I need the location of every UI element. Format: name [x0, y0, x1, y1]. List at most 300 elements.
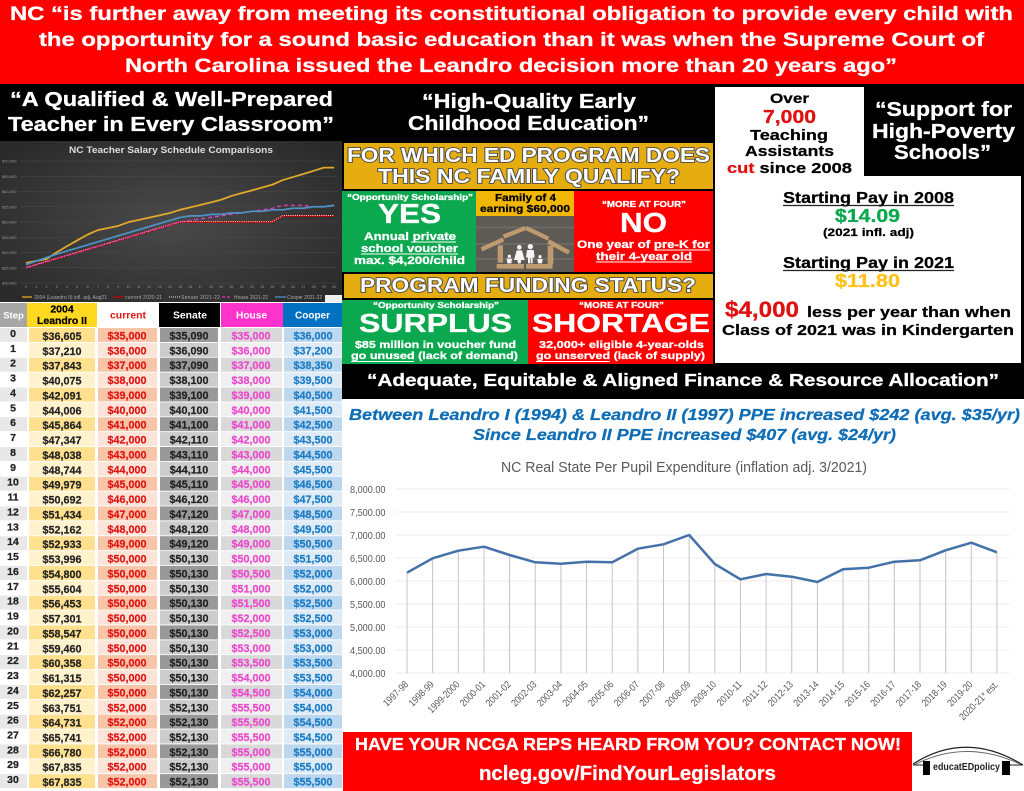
card: more at four no: their 4-year old: [596, 251, 692, 263]
row: step 23: $53,500: [293, 672, 333, 684]
callout: teaching assistants cut: [727, 90, 852, 177]
line chart: real state per pupil expenditure: 2001-02: [483, 679, 513, 709]
row: step 9: $44,000: [231, 464, 271, 476]
row: step 12: $47,120: [169, 509, 209, 521]
text: PPE increase summary: Between Leandro I (1994) & Leandro II (1997) PPE increased $242 (avg. $35/yr): [349, 407, 1020, 424]
line chart: teacher salary schedule comparisons: $70,000: [2, 158, 17, 164]
text: PPE increase summary: Since Leandro II PPE increased $407 (avg. $24/yr): [473, 427, 896, 444]
row: step 16: 16: [7, 566, 19, 578]
table header row: Cooper: [295, 310, 330, 322]
row: step 20: $52,500: [231, 628, 271, 640]
line chart: real state per pupil expenditure: 5,500.00: [350, 599, 386, 611]
row: step 30: $52,130: [169, 777, 209, 789]
row: step 5: [0, 402, 342, 417]
row: step 0: $35,000: [231, 330, 271, 342]
title banner: the opportunity for a sound basic education than it was when the Supreme Court of: [39, 29, 985, 51]
row: step 3: $38,000: [231, 375, 271, 387]
heading: finance and resource allocation: “Adequate, Equitable & Aligned Finance & Resource Allocation”: [367, 370, 999, 390]
row: step 29: $52,000: [107, 762, 147, 774]
line chart: real state per pupil expenditure: 2011-12: [740, 679, 770, 708]
row: step 22: $60,358: [42, 658, 82, 670]
card: more at four no: One year of pre-K for: [577, 239, 711, 251]
row: step 5: 5: [10, 402, 16, 414]
card: opportunity scholarship yes: YES: [378, 198, 441, 229]
row: step 9: 9: [10, 462, 16, 474]
row: step 29: $67,835: [42, 762, 82, 774]
card: surplus: SURPLUS: [359, 308, 512, 338]
row: step 22: [0, 655, 342, 670]
row: step 4: $39,100: [169, 390, 209, 402]
row: step 18: 18: [7, 596, 19, 608]
line chart: teacher salary schedule comparisons: 15: [178, 285, 182, 289]
row: step 26: 26: [7, 715, 19, 727]
row: step 3: $40,075: [42, 376, 82, 388]
row: step 23: $50,130: [169, 672, 209, 684]
row: step 8: $43,110: [170, 450, 208, 462]
line chart: teacher salary schedule comparisons: $65,000: [2, 174, 17, 179]
line chart: teacher salary schedule comparisons: 2004 (Leandro II) infl. adj. Aug21: [34, 295, 107, 301]
callout: $4,000 less per year: $4,000: [725, 297, 799, 322]
line chart: real state per pupil expenditure: 1999-2000: [426, 679, 462, 715]
panel: finance and resource allocation: [342, 364, 1024, 791]
row: step 30: $52,000: [107, 777, 147, 789]
callout: teaching assistants cut: cut since 2008: [727, 161, 852, 177]
row: step 17: 17: [7, 581, 19, 593]
row: step 25: 25: [7, 700, 19, 712]
text: PPE increase summary: [349, 407, 1020, 444]
row: step 12: [0, 506, 342, 521]
line chart: teacher salary schedule comparisons: 21: [240, 285, 244, 289]
line chart: teacher salary schedule comparisons: House 2021-22: [234, 295, 268, 301]
row: step 24: $50,130: [169, 687, 209, 699]
row: step 14: $50,500: [293, 539, 333, 551]
row: step 15: $51,500: [293, 554, 333, 566]
row: step 17: $50,130: [169, 583, 209, 595]
row: step 24: 24: [7, 685, 19, 697]
row: step 22: $53,500: [293, 658, 333, 670]
line chart: real state per pupil expenditure: 2007-08: [637, 679, 667, 709]
row: step 7: $47,347: [42, 435, 82, 447]
label: family of 4 earning $60,000: earning $60,000: [480, 204, 571, 215]
row: step 16: $54,800: [42, 569, 82, 581]
card: shortage: SHORTAGE: [532, 308, 710, 338]
callout: $4,000 less per year: Class of 2021 was in Kindergarten: [722, 323, 1014, 339]
line chart: teacher salary schedule comparisons: 8: [107, 285, 109, 289]
row: step 13: $49,500: [293, 524, 333, 536]
call to action: contact legislators: [343, 732, 912, 791]
row: step 15: $50,000: [231, 554, 271, 566]
row: step 16: [0, 566, 342, 581]
row: step 1: [0, 343, 342, 358]
row: step 5: $44,006: [42, 405, 82, 417]
row: step 8: $44,500: [293, 450, 333, 462]
card: opportunity scholarship yes: school voucher: [361, 243, 459, 255]
card: opportunity scholarship yes: “Opportunity Scholarship”: [347, 193, 473, 202]
table: salary schedule by step: [0, 302, 342, 791]
table header row: Leandro II: [37, 315, 87, 327]
heading: qualified teacher: “A Qualified & Well-Prepared: [10, 88, 333, 111]
row: step 30: 30: [7, 774, 19, 786]
row: step 13: $48,120: [169, 524, 209, 536]
row: step 20: $58,547: [42, 628, 82, 640]
row: step 26: $55,500: [231, 717, 271, 729]
row: step 13: $52,162: [42, 524, 82, 536]
line chart: teacher salary schedule comparisons: Cooper 2021-22: [287, 295, 322, 301]
label: family of 4 earning $60,000: [476, 191, 574, 216]
row: step 4: $39,000: [231, 390, 271, 402]
row: step 6: $45,864: [42, 420, 82, 432]
row: step 17: [0, 581, 342, 596]
row: step 6: [0, 417, 342, 432]
row: step 1: $37,200: [293, 345, 333, 357]
stat: starting pay in 2021: [783, 255, 954, 291]
line chart: real state per pupil expenditure: 1997-98: [381, 679, 411, 709]
line chart: real state per pupil expenditure: 2017-18: [894, 679, 924, 709]
line chart: real state per pupil expenditure: 2018-19: [920, 679, 949, 709]
title banner: [0, 0, 1024, 84]
card: surplus: “Opportunity Scholarship”: [373, 301, 499, 310]
row: step 10: $45,000: [107, 479, 147, 491]
row: step 7: 7: [10, 432, 16, 444]
row: step 2: 2: [10, 358, 16, 370]
card: shortage: 32,000+ eligible 4-year-olds: [539, 339, 704, 351]
row: step 23: $54,000: [231, 672, 271, 684]
row: step 2: $37,000: [231, 360, 271, 372]
line chart: teacher salary schedule comparisons: 7: [97, 285, 99, 289]
row: step 10: [0, 477, 342, 492]
row: step 19: 19: [7, 610, 19, 622]
line chart: real state per pupil expenditure: NC Real State Per Pupil Expenditure (inflation adj. 3/2021): [501, 459, 867, 476]
row: step 22: $50,000: [107, 658, 147, 670]
title banner: North Carolina issued the Leandro decision more than 20 years ago”: [125, 55, 897, 77]
line chart: teacher salary schedule comparisons: 5: [76, 285, 78, 289]
row: step 22: $53,500: [231, 658, 271, 670]
row: step 27: $52,130: [169, 732, 209, 744]
line chart: teacher salary schedule comparisons: Senate 2021-22: [181, 295, 220, 301]
callout: teaching assistants cut: 7,000: [763, 106, 816, 127]
line chart: teacher salary schedule comparisons: 4: [66, 285, 68, 289]
line chart: teacher salary schedule comparisons: $40,000: [2, 250, 17, 255]
row: step 25: [0, 700, 342, 715]
panel: early childhood education: [342, 85, 715, 364]
row: step 11: $46,000: [107, 494, 147, 506]
row: step 19: $52,000: [231, 613, 271, 625]
stat: starting pay in 2008: [783, 190, 954, 239]
row: step 2: $37,000: [107, 360, 147, 372]
row: step 12: 12: [7, 506, 19, 518]
row: step 20: $53,000: [293, 628, 333, 640]
card: shortage: “MORE AT FOUR”: [579, 301, 664, 310]
row: step 2: $37,843: [42, 361, 82, 373]
row: step 22: 22: [7, 655, 19, 667]
row: step 25: $52,130: [169, 702, 209, 714]
row: step 21: $59,460: [42, 643, 82, 655]
line chart: teacher salary schedule comparisons: 14: [168, 285, 172, 289]
line chart: real state per pupil expenditure: 2019-20: [945, 679, 975, 709]
table header row: Step: [3, 310, 24, 322]
line chart: real state per pupil expenditure: 4,500.00: [350, 645, 386, 657]
row: step 0: 0: [10, 328, 16, 340]
row: step 4: [0, 388, 342, 402]
line chart: real state per pupil expenditure: 7,000.00: [350, 530, 386, 542]
line chart: teacher salary schedule comparisons: 25: [281, 285, 285, 289]
line chart: real state per pupil expenditure: 2006-07: [612, 679, 641, 709]
row: step 8: $48,038: [42, 450, 82, 462]
row: step 27: 27: [7, 730, 19, 742]
row: step 14: [0, 536, 342, 551]
line chart: real state per pupil expenditure: 2005-06: [586, 679, 616, 709]
row: step 21: $53,000: [231, 643, 271, 655]
row: step 0: $36,605: [42, 331, 82, 343]
row: step 3: [0, 373, 342, 388]
row: step 8: [0, 447, 342, 462]
card: opportunity scholarship yes: [342, 191, 476, 272]
line chart: real state per pupil expenditure: 4,000.00: [350, 668, 386, 680]
row: step 5: $41,500: [293, 405, 333, 417]
row: step 1: $36,000: [231, 345, 271, 357]
row: step 24: $62,257: [42, 688, 82, 700]
row: step 7: $43,500: [293, 435, 333, 447]
row: step 8: $43,000: [107, 450, 147, 462]
row: step 4: $40,500: [293, 390, 333, 402]
card: surplus: [342, 300, 528, 364]
row: step 6: $41,000: [231, 420, 271, 432]
row: step 3: $38,100: [169, 375, 209, 387]
row: step 30: $67,835: [42, 777, 82, 789]
line chart: real state per pupil expenditure: [350, 459, 1010, 722]
callout: teaching assistants cut: Assistants: [745, 143, 834, 160]
row: step 11: $47,500: [293, 494, 333, 506]
call to action: contact legislators: ncleg.gov/FindYourLegislators: [479, 763, 776, 785]
banner: which program qualifies: FOR WHICH ED PROGRAM DOES: [347, 145, 710, 167]
card: more at four no: “MORE AT FOUR”: [602, 200, 686, 209]
row: step 13: $48,000: [107, 524, 147, 536]
row: step 28: $52,000: [107, 747, 147, 759]
row: step 14: $49,120: [169, 539, 209, 551]
row: step 23: 23: [7, 670, 19, 682]
row: step 17: $50,000: [107, 583, 147, 595]
stat: starting pay in 2021: $11.80: [835, 270, 900, 291]
row: step 1: $36,090: [169, 345, 209, 357]
row: step 16: $50,500: [231, 568, 271, 580]
line chart: real state per pupil expenditure: 2013-14: [791, 679, 821, 709]
line chart: real state per pupil expenditure: 2000-01: [458, 679, 487, 709]
row: step 25: $52,000: [107, 702, 147, 714]
stat: starting pay in 2008: $14.09: [835, 205, 900, 226]
row: step 7: $42,000: [231, 435, 271, 447]
line chart: real state per pupil expenditure: 2008-09: [663, 679, 693, 709]
panel: qualified teacher: [0, 85, 342, 791]
card: more at four no: [574, 191, 713, 272]
row: step 9: [0, 462, 342, 477]
row: step 24: $54,000: [293, 687, 333, 699]
card: shortage: go unserved (lack of supply): [536, 350, 705, 362]
card: shortage: [528, 300, 713, 364]
row: step 14: $52,933: [42, 539, 82, 551]
line chart: teacher salary schedule comparisons: 24: [271, 285, 274, 289]
line chart: real state per pupil expenditure: 2015-16: [843, 679, 872, 709]
row: step 28: $66,780: [42, 747, 82, 759]
title banner: NC “is further away from meeting its constitutional obligation to provide every child with: [10, 3, 1013, 25]
line chart: real state per pupil expenditure: 2009-10: [689, 679, 718, 709]
row: step 18: $50,000: [107, 598, 147, 610]
callout: teaching assistants cut: Over: [770, 90, 810, 106]
row: step 28: $52,130: [169, 747, 209, 759]
row: step 17: $52,000: [293, 583, 333, 595]
row: step 17: $51,000: [231, 583, 271, 595]
row: step 18: $50,130: [169, 598, 209, 610]
row: step 10: $49,979: [42, 480, 82, 492]
row: step 12: $48,500: [293, 509, 333, 521]
row: step 24: $50,000: [107, 687, 147, 699]
row: step 19: $50,130: [169, 613, 209, 625]
callout: $4,000 less per year: [722, 297, 1014, 339]
row: step 23: $61,315: [42, 673, 82, 685]
row: step 23: $50,000: [107, 672, 147, 684]
row: step 5: $40,000: [231, 405, 271, 417]
row: step 13: 13: [7, 521, 19, 533]
row: step 6: $41,000: [107, 420, 147, 432]
row: step 26: $64,731: [42, 718, 82, 730]
row: step 20: $50,130: [169, 628, 209, 640]
row: step 28: $55,000: [293, 747, 333, 759]
line chart: teacher salary schedule comparisons: $45,000: [2, 235, 17, 240]
row: step 0: [0, 328, 342, 343]
line chart: real state per pupil expenditure: 2003-04: [535, 679, 564, 709]
line chart: teacher salary schedule comparisons: 0: [25, 285, 27, 289]
logo: educatEDpolicy: [913, 747, 1023, 775]
table header row: [0, 303, 342, 327]
card: more at four no: NO: [620, 207, 667, 238]
heading: qualified teacher: Teacher in Every Classroom”: [8, 113, 334, 136]
line chart: teacher salary schedule comparisons: 16: [188, 285, 192, 289]
row: step 27: $65,741: [42, 732, 82, 744]
line chart: real state per pupil expenditure: 2014-15: [817, 679, 847, 709]
row: step 6: $42,500: [293, 420, 333, 432]
row: step 20: 20: [7, 625, 19, 637]
row: step 15: $50,000: [107, 554, 147, 566]
row: step 16: $50,130: [169, 568, 209, 580]
line chart: teacher salary schedule comparisons: 17: [199, 285, 203, 289]
banner: which program qualifies: [344, 143, 713, 189]
logo: educatEDpolicy: educatEDpolicy: [933, 762, 1000, 773]
line chart: teacher salary schedule comparisons: 20: [229, 285, 233, 289]
row: step 21: $53,000: [293, 643, 333, 655]
line chart: real state per pupil expenditure: 5,000.00: [350, 622, 386, 634]
card: opportunity scholarship yes: max. $4,200/child: [354, 255, 465, 267]
table header row: House: [236, 310, 267, 322]
row: step 9: $48,744: [42, 465, 82, 477]
row: step 20: [0, 625, 342, 640]
line chart: teacher salary schedule comparisons: NC Teacher Salary Schedule Comparisons: [69, 145, 273, 155]
row: step 26: $54,500: [293, 717, 333, 729]
line chart: real state per pupil expenditure: 2012-13: [766, 679, 795, 709]
line chart: teacher salary schedule comparisons: [0, 141, 342, 302]
heading: early childhood education: [343, 85, 715, 142]
row: step 21: [0, 640, 342, 655]
row: step 5: $40,100: [169, 405, 209, 417]
row: step 4: 4: [10, 388, 16, 400]
row: step 11: 11: [7, 492, 19, 504]
card: surplus: $85 million in voucher fund: [355, 339, 516, 351]
heading: qualified teacher: [0, 85, 342, 141]
row: step 2: [0, 358, 342, 373]
row: step 15: 15: [7, 551, 19, 563]
panel: support for high-poverty schools: [715, 87, 1021, 363]
line chart: teacher salary schedule comparisons: 29: [322, 285, 326, 289]
row: step 29: 29: [7, 759, 19, 771]
stat: starting pay in 2021: Starting Pay in 2021: [783, 255, 954, 272]
row: step 9: $45,500: [293, 464, 333, 476]
heading: support for high-poverty schools: High-Poverty: [872, 121, 1016, 143]
stat: starting pay in 2008: Starting Pay in 2008: [783, 190, 954, 207]
row: step 19: [0, 610, 342, 626]
line chart: teacher salary schedule comparisons: $60,000: [2, 189, 17, 194]
card: surplus: go unused (lack of demand): [351, 350, 518, 362]
row: step 6: $41,100: [169, 420, 209, 432]
row: step 29: $55,000: [231, 762, 271, 774]
row: step 18: $51,500: [231, 598, 271, 610]
row: step 29: [0, 759, 342, 774]
line chart: real state per pupil expenditure: 6,500.00: [350, 553, 386, 565]
row: step 28: $55,000: [231, 747, 271, 759]
row: step 11: $46,000: [231, 494, 271, 506]
row: step 27: [0, 730, 342, 744]
row: step 27: $55,500: [231, 732, 271, 744]
row: step 21: $50,130: [169, 643, 209, 655]
row: step 0: $35,000: [107, 330, 147, 342]
row: step 25: $63,751: [42, 703, 82, 715]
heading: early childhood education: Childhood Education”: [408, 113, 649, 135]
row: step 15: $53,996: [42, 554, 82, 566]
table header row: Senate: [173, 310, 207, 322]
line chart: real state per pupil expenditure: 2002-03: [509, 679, 539, 709]
row: step 12: $47,000: [231, 509, 271, 521]
row: step 22: $50,130: [169, 658, 209, 670]
row: step 8: 8: [10, 447, 16, 459]
row: step 0: $36,000: [293, 330, 333, 342]
row: step 3: $38,000: [107, 375, 147, 387]
line chart: teacher salary schedule comparisons: current 2020-21: [125, 295, 162, 301]
row: step 11: [0, 492, 342, 507]
icon: family under wooden house: [476, 216, 574, 272]
row: step 11: $46,120: [169, 494, 209, 506]
row: step 3: $39,500: [293, 375, 333, 387]
row: step 25: $55,500: [231, 702, 271, 714]
row: step 16: $50,000: [107, 568, 147, 580]
row: step 19: $50,000: [107, 613, 147, 625]
row: step 0: $35,090: [169, 330, 209, 342]
row: step 19: $57,301: [42, 614, 82, 626]
line chart: teacher salary schedule comparisons: 12: [147, 285, 151, 289]
row: step 1: $36,000: [107, 345, 147, 357]
line chart: teacher salary schedule comparisons: 26: [291, 285, 295, 289]
row: step 10: $45,000: [231, 479, 271, 491]
heading: finance and resource allocation: [342, 364, 1024, 399]
line chart: real state per pupil expenditure: 2016-17: [868, 679, 898, 709]
row: step 26: $52,130: [169, 717, 209, 729]
row: step 2: $38,350: [293, 360, 333, 372]
row: step 25: $54,000: [293, 702, 333, 714]
call to action: contact legislators: HAVE YOUR NCGA REPS HEARD FROM YOU? CONTACT NOW!: [355, 734, 901, 754]
row: step 21: $50,000: [107, 643, 147, 655]
banner: program funding status: PROGRAM FUNDING STATUS?: [360, 275, 696, 297]
row: step 3: 3: [10, 373, 16, 385]
row: step 12: $51,434: [42, 509, 82, 521]
line chart: teacher salary schedule comparisons: $30,000: [2, 280, 17, 286]
table header row: current: [110, 310, 147, 322]
row: step 1: $37,210: [42, 346, 82, 358]
